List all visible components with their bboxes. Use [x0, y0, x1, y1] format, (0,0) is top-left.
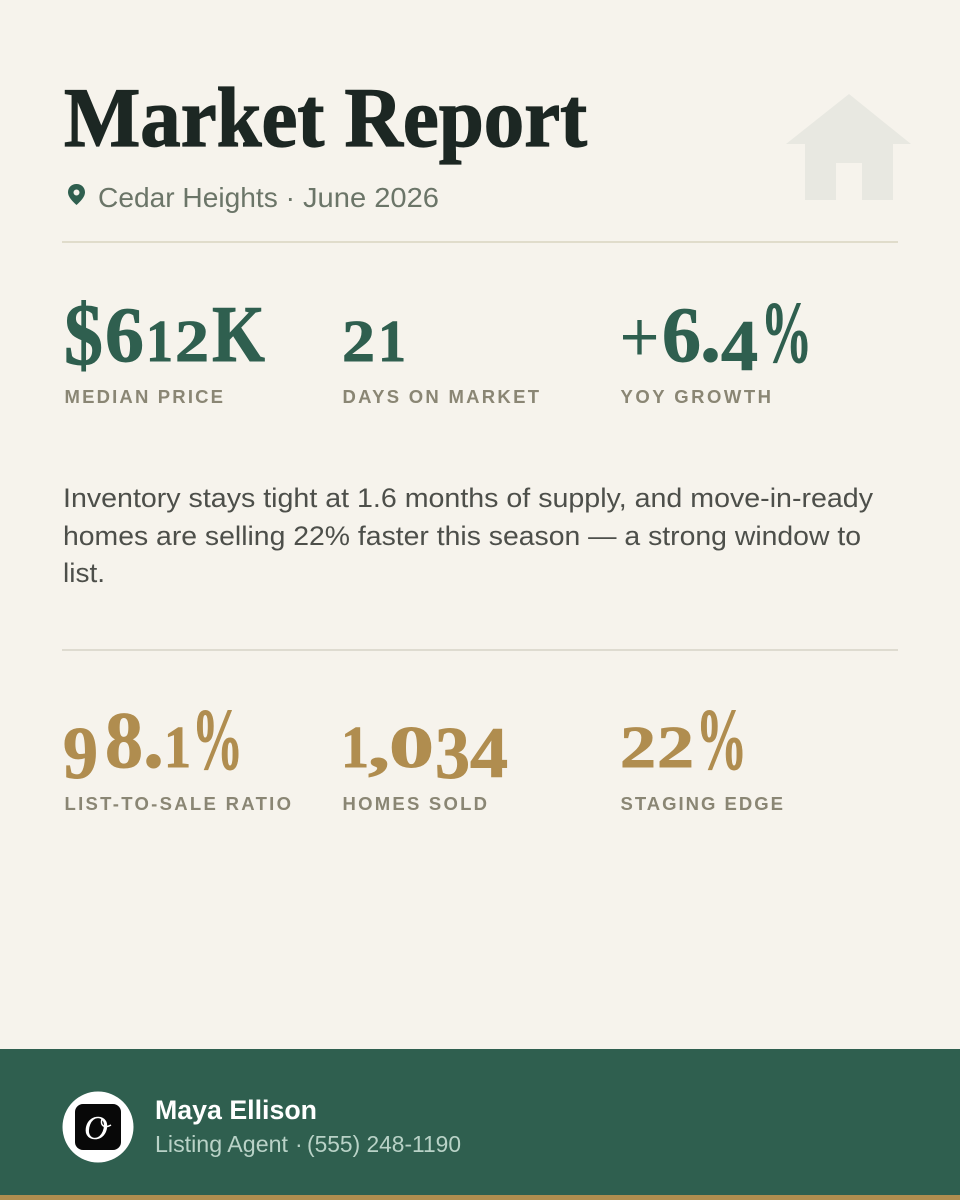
stat: median price: 6 — [105, 291, 144, 378]
stat: median price — [64, 287, 265, 407]
stat: yoy growth: 6 — [662, 291, 701, 378]
summary paragraph: Inventory stays tight at 1.6 months of supply, and move-in-ready — [63, 483, 874, 513]
agent role and phone: Listing Agent — [155, 1131, 289, 1157]
stat: staging edge: 2 — [657, 714, 694, 780]
stat: yoy growth: % — [761, 285, 812, 382]
stat: list-to-sale ratio: 9 — [63, 713, 98, 795]
title: Market Report — [64, 71, 587, 165]
stat: list-to-sale ratio — [63, 692, 291, 814]
location and date: Cedar Heights · — [98, 182, 295, 213]
agent avatar: O — [84, 1110, 108, 1147]
stat: yoy growth: . — [700, 287, 721, 380]
stat: homes sold: 4 — [470, 713, 508, 793]
stat: days on market: DAYS ON MARKET — [342, 386, 540, 407]
stat: homes sold: 0 — [389, 714, 434, 780]
stat: homes sold — [341, 713, 508, 814]
location and date: June 2026 — [303, 182, 439, 213]
icon: location pin — [68, 184, 85, 205]
stat: median price: K — [212, 291, 265, 379]
icon: house watermark — [786, 94, 911, 200]
stat: staging edge — [620, 692, 783, 814]
summary paragraph — [63, 483, 874, 588]
stat: days on market: 1 — [378, 308, 406, 374]
stat: yoy growth — [620, 285, 812, 407]
stat: yoy growth: 4 — [721, 306, 758, 386]
stat: median price: 1 — [146, 308, 173, 374]
subtitle with location — [68, 182, 439, 213]
stat: days on market: 2 — [342, 308, 375, 374]
agent role and phone: (555) 248-1190 — [307, 1131, 461, 1157]
stat: homes sold: HOMES SOLD — [342, 793, 487, 814]
stat: list-to-sale ratio: LIST-TO-SALE RATIO — [64, 793, 291, 814]
stat: yoy growth: YOY GROWTH — [620, 386, 771, 407]
stat: list-to-sale ratio: . — [143, 693, 164, 786]
stat: list-to-sale ratio: 1 — [164, 714, 191, 780]
stat: list-to-sale ratio: 8 — [105, 697, 143, 785]
stat: median price: 2 — [175, 308, 209, 374]
stat: staging edge: % — [696, 692, 747, 789]
agent role and phone: · — [295, 1131, 303, 1157]
stat: homes sold: 1 — [341, 714, 369, 780]
stat: median price: MEDIAN PRICE — [64, 386, 223, 407]
stat: staging edge: 2 — [620, 714, 656, 780]
agent name: Maya Ellison — [155, 1095, 317, 1125]
stat: homes sold: 3 — [435, 713, 470, 795]
stat: staging edge: STAGING EDGE — [620, 793, 783, 814]
summary paragraph: homes are selling 22% faster this season — a strong window to — [63, 521, 861, 551]
stat: homes sold: , — [368, 713, 390, 781]
summary paragraph: list. — [63, 558, 105, 588]
stat: days on market — [342, 308, 540, 407]
stat: yoy growth: + — [620, 297, 659, 377]
stat: list-to-sale ratio: % — [192, 692, 243, 789]
footer band — [0, 1049, 960, 1200]
agent avatar — [62, 1092, 134, 1162]
stat: median price: $ — [64, 287, 103, 384]
